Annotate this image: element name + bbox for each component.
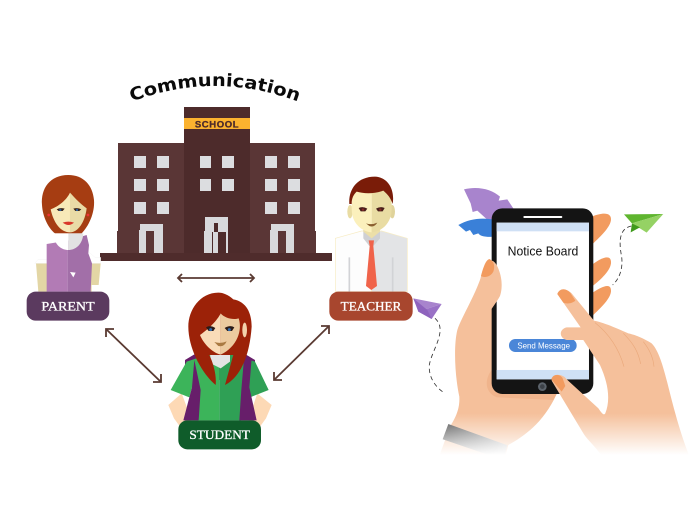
knuckle lines: [595, 323, 654, 367]
left wing: [117, 143, 184, 253]
dashed path: green plane: [613, 226, 631, 285]
bottom fade: [420, 413, 697, 468]
teacher figure: [329, 177, 413, 321]
dress: [47, 241, 68, 292]
icon: blue feather: [458, 219, 495, 237]
windows: [134, 156, 300, 214]
arrow: teacher to student: [274, 326, 329, 380]
shirt: [171, 355, 219, 420]
arrow: school to student: [178, 274, 254, 282]
shirt: [335, 231, 372, 292]
home button: [538, 382, 547, 391]
centre tower: [184, 107, 250, 253]
backpack straps: [183, 360, 201, 420]
left thumb: [473, 260, 502, 320]
button: Send Message: [509, 339, 577, 352]
face: [200, 313, 221, 355]
phone screen: [497, 223, 589, 379]
school sign: [184, 118, 250, 130]
thumb nail: [481, 259, 494, 277]
phone and hands: [413, 188, 697, 468]
backpack back: [185, 354, 255, 380]
collar: [210, 352, 230, 368]
icon: purple feather: [464, 188, 514, 225]
facial features: [47, 208, 89, 225]
parent label: PARENT: [41, 299, 95, 313]
icon: purple paper plane: [413, 298, 442, 319]
arms: [36, 263, 47, 292]
teacher label: TEACHER: [341, 299, 402, 313]
facial features: [359, 207, 385, 227]
speaker: [523, 216, 562, 218]
index nail: [557, 289, 575, 303]
right wing: [250, 143, 316, 253]
face: [51, 193, 70, 232]
button: Send Message: Send Message: [517, 340, 570, 350]
arms: [168, 393, 192, 427]
student figure: [168, 293, 272, 449]
student label: [178, 420, 261, 449]
hair: [188, 293, 252, 385]
school building: [100, 107, 332, 261]
teacher label: [329, 292, 413, 321]
parent label: [27, 292, 109, 321]
right thumb nail: [551, 375, 565, 392]
collar: [363, 230, 380, 246]
doors: [139, 217, 294, 253]
right hand: [552, 290, 688, 463]
title: Communication: Communication: [130, 73, 299, 101]
arrow: parent to student: [106, 329, 161, 382]
hair: [42, 175, 94, 233]
student label: STUDENT: [189, 428, 250, 442]
left hand palm: [437, 270, 557, 463]
hair: [349, 177, 393, 204]
facial features: [206, 326, 234, 346]
icon: green paper plane: [624, 214, 663, 233]
dashed path: purple plane: [429, 318, 445, 393]
collar: [53, 233, 68, 250]
watch strap: [443, 424, 507, 460]
back fingers: [592, 214, 611, 317]
parent figure: [27, 175, 109, 321]
heading: Notice Board: Notice Board: [508, 245, 578, 259]
school sign: SCHOOL: [195, 120, 239, 130]
neck and head: [347, 187, 395, 238]
ground slab: [100, 253, 332, 261]
phone: [492, 208, 593, 394]
tie: [366, 240, 377, 290]
